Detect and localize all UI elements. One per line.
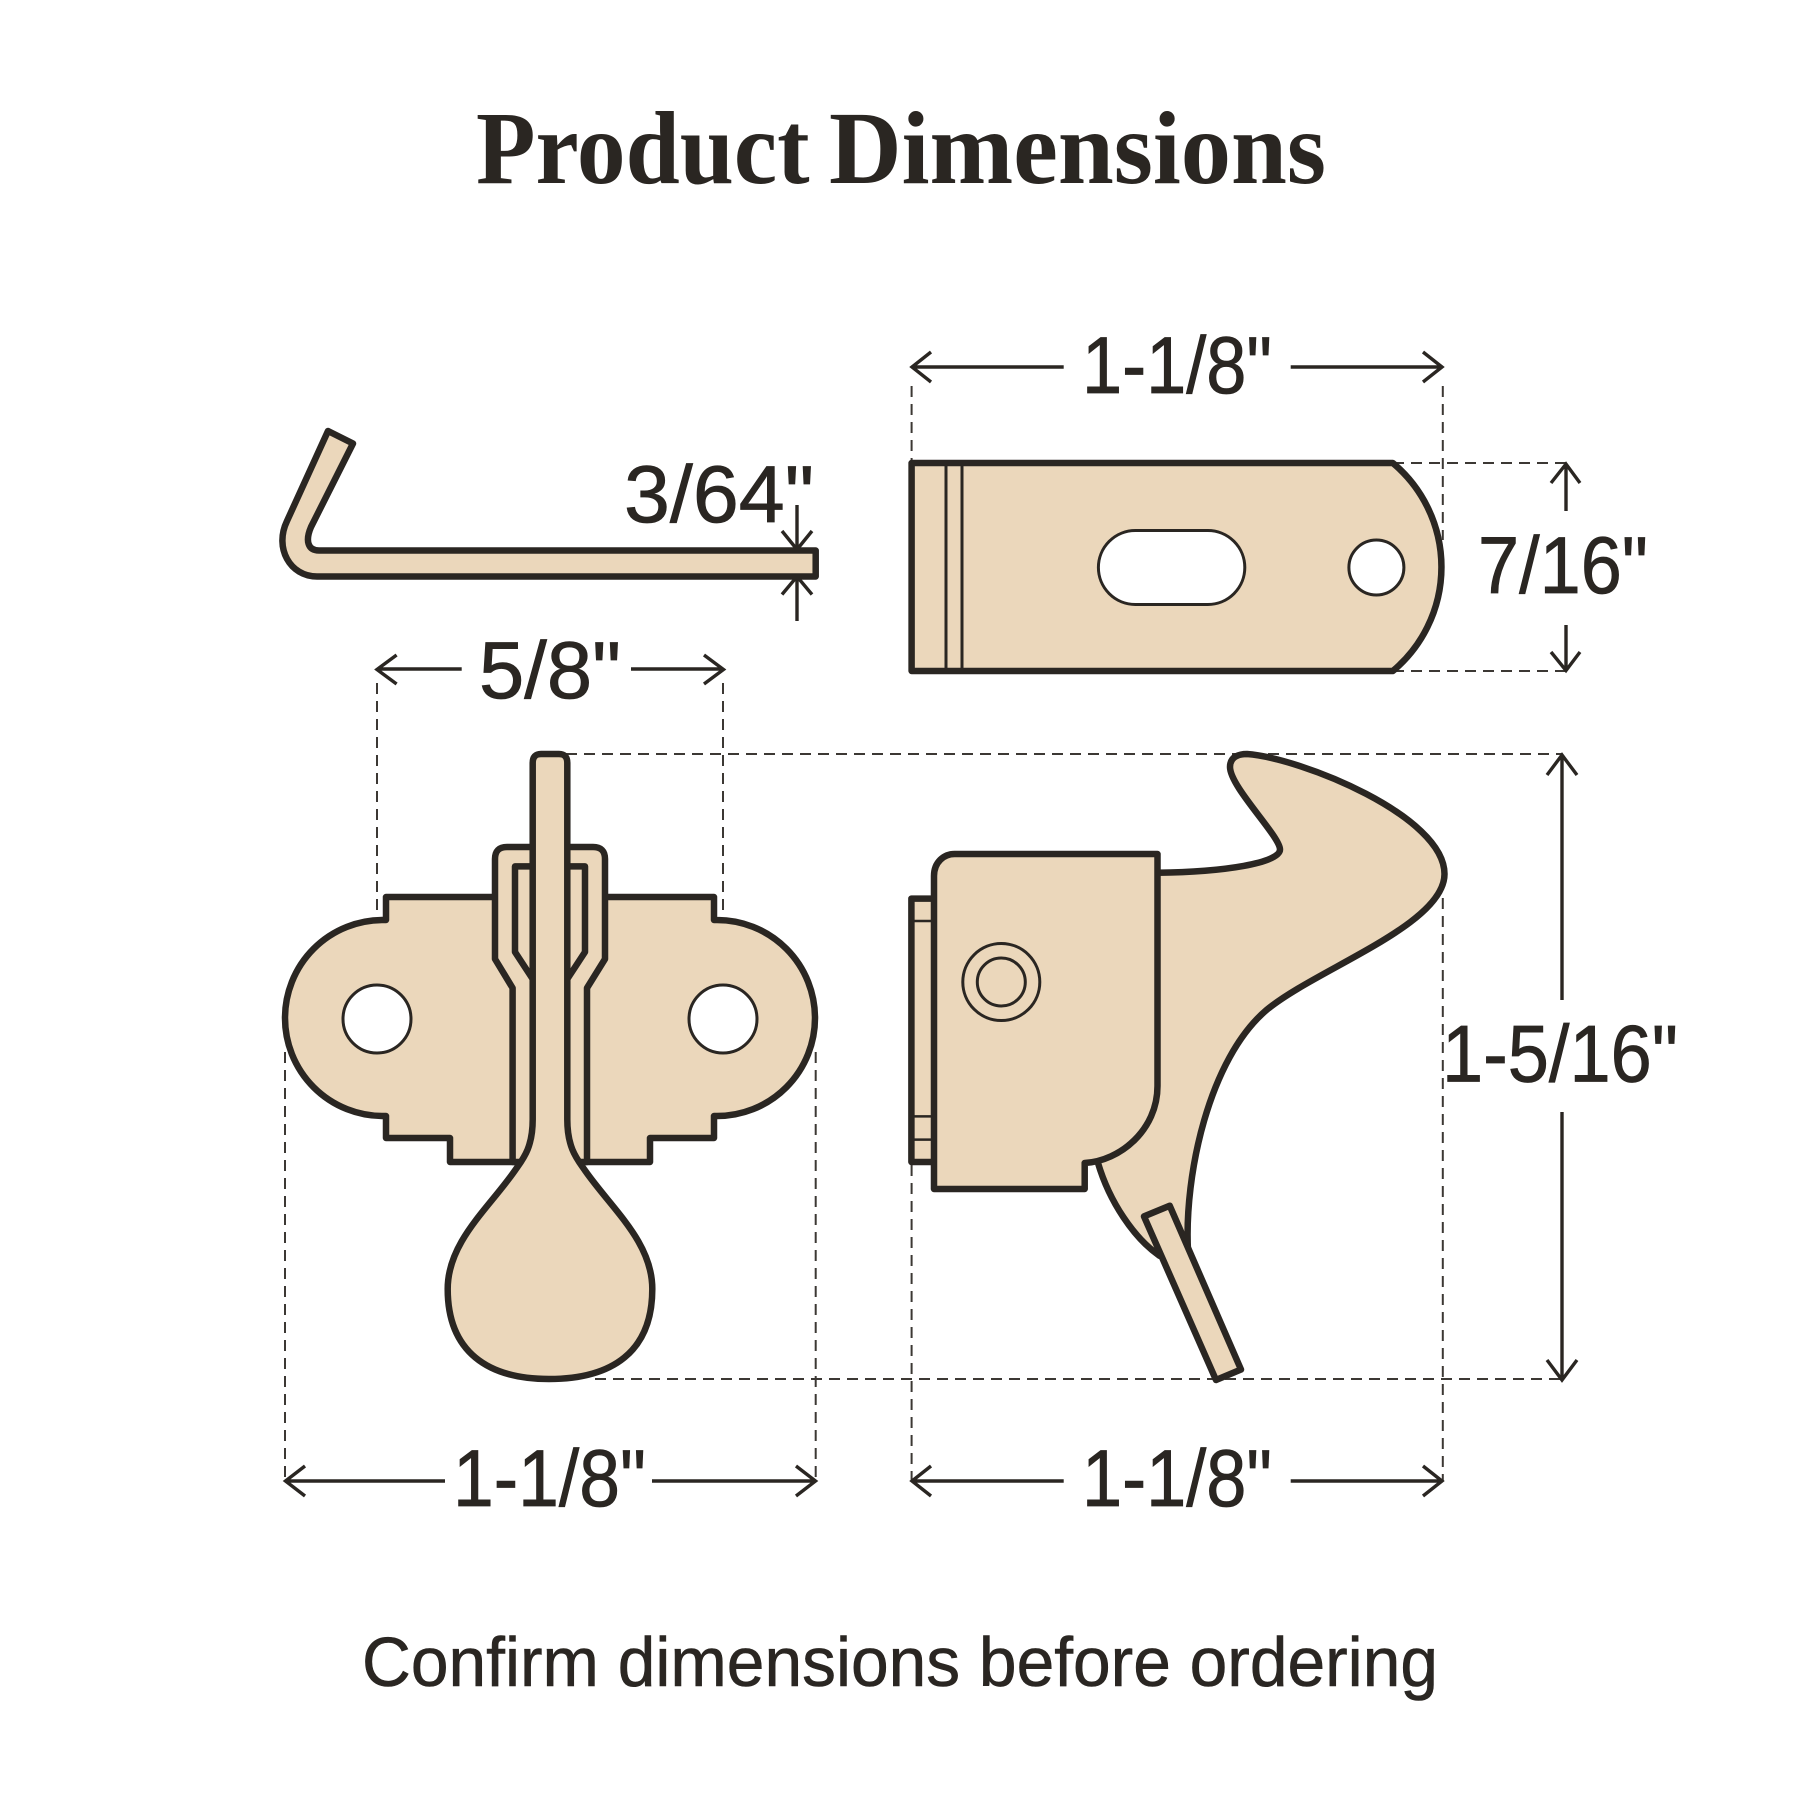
- side view latch: [911, 754, 1444, 1380]
- back plate: [911, 899, 936, 1162]
- dimension: 5/8 inch hole spacing: 5/8": [479, 626, 621, 716]
- dimension: 1-5/16 inch height: [1442, 755, 1678, 1380]
- dimension: 7/16 inch plate height: 7/16": [1478, 521, 1648, 611]
- dimension: 1-5/16 inch height: 1-5/16": [1442, 1010, 1678, 1100]
- pivot screw: [963, 944, 1040, 1020]
- title: [476, 91, 1326, 206]
- dimension: 3/64 inch thickness: 3/64": [624, 450, 814, 540]
- front view latch: [285, 754, 815, 1379]
- dimension: 1-1/8 inch plate width: 1-1/8": [1082, 321, 1272, 411]
- inner clip: [515, 866, 585, 981]
- dimension: 5/8 inch hole spacing: [377, 626, 724, 716]
- lever tab: [1144, 1206, 1241, 1380]
- mounting plate: [285, 897, 815, 1162]
- body housing: [934, 854, 1158, 1189]
- dimension: 1-1/8 inch side width: [912, 1434, 1442, 1524]
- dimension: 1-1/8 inch side width: 1-1/8": [1082, 1434, 1272, 1524]
- dimension: 1-1/8 inch plate width: [912, 321, 1442, 411]
- hook lever: [1098, 754, 1444, 1256]
- outer clip: [495, 847, 605, 1162]
- title: Product: [476, 91, 810, 206]
- footer note: Confirm dimensions before ordering: [362, 1623, 1438, 1701]
- dimension: 7/16 inch plate height: [1478, 464, 1648, 670]
- spoon handle pin: [448, 754, 652, 1379]
- dimension: 1-1/8 inch latch width: 1-1/8": [453, 1434, 646, 1524]
- title: Dimensions: [829, 91, 1326, 206]
- top view plate: [912, 463, 1441, 671]
- side view bracket: [282, 431, 816, 576]
- dimension: 1-1/8 inch latch width: [286, 1434, 816, 1524]
- dashed extension lines: [285, 386, 1566, 1481]
- dimension: 3/64 inch thickness: [624, 450, 814, 621]
